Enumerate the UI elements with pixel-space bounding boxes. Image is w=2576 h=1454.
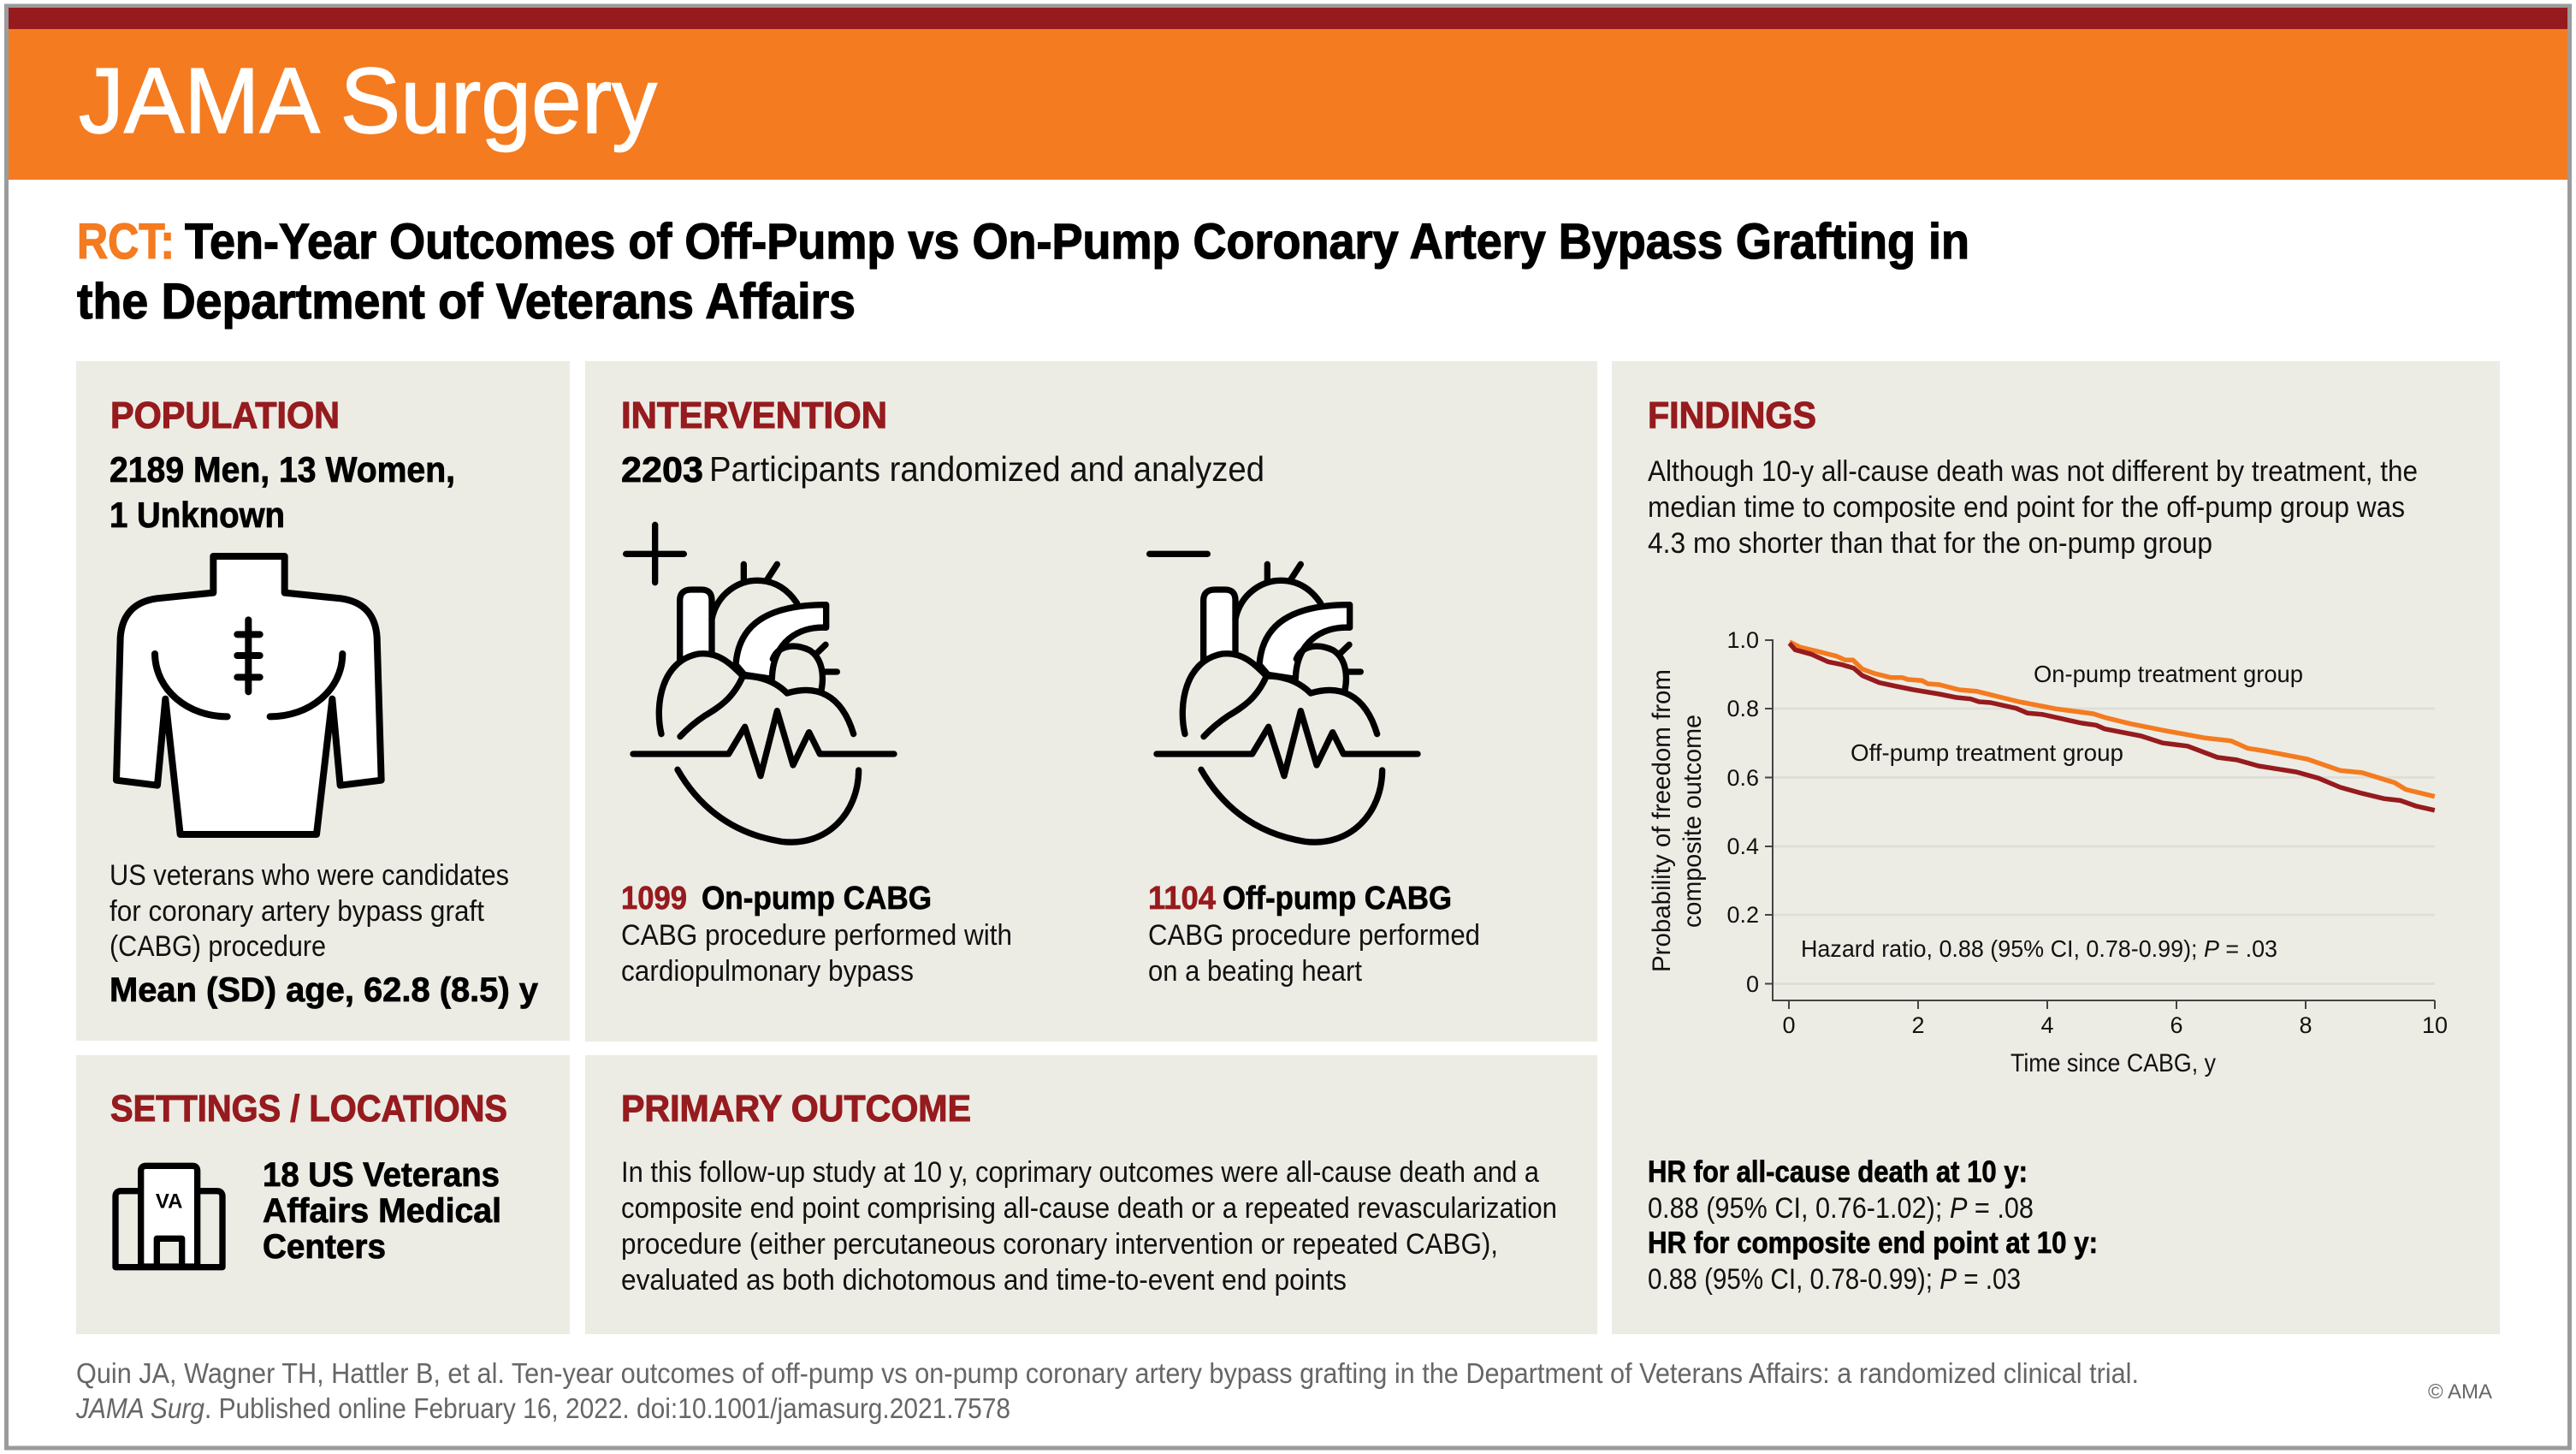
arm: on-pump CABG: CABG procedure performed with — [621, 919, 1012, 952]
panel: primary outcome — [585, 1055, 1597, 1334]
citation — [75, 1357, 2139, 1424]
panel: intervention — [585, 361, 1597, 1042]
y-axis tick labels: 0.2 — [1726, 902, 1759, 928]
header banner — [9, 8, 2567, 180]
y-axis tick labels: 1.0 — [1726, 627, 1759, 653]
number of sites — [263, 1156, 501, 1266]
x-axis tick labels: 4 — [2040, 1012, 2054, 1038]
randomized participants: 2203 — [621, 449, 703, 490]
x-axis tick labels: 10 — [2422, 1012, 2448, 1038]
curve: off-pump treatment group — [1790, 644, 2435, 810]
mean age: Mean (SD) age, 62.8 (8.5) y — [110, 971, 539, 1009]
participant counts — [110, 449, 455, 535]
number of sites: 18 US Veterans — [263, 1156, 500, 1194]
findings summary: Although 10-y all-cause death was not different by treatment, the — [1648, 455, 2418, 488]
hazard ratio annotation: Hazard ratio, 0.88 (95% CI, 0.78-0.99); P = .03 — [1801, 935, 2277, 962]
panel: findings — [1612, 361, 2500, 1334]
icon: torso with sternal incision — [116, 556, 382, 834]
primary outcome description: evaluated as both dichotomous and time-to-event end points — [621, 1264, 1347, 1297]
title — [77, 214, 1969, 329]
citation: Quin JA, Wagner TH, Hattler B, et al. Ten-year outcomes of off-pump vs on-pump coronary artery bypass grafting in the Department of Veterans Affairs: a randomized clinical trial. — [76, 1357, 2139, 1389]
hazard ratio results: 0.88 (95% CI, 0.76-1.02); P = .08 — [1648, 1192, 2034, 1225]
hazard ratio results: HR for all-cause death at 10 y: — [1648, 1155, 2028, 1189]
primary outcome description: composite end point comprising all-cause death or a repeated revascularization — [621, 1192, 1557, 1225]
hazard ratio results: 0.88 (95% CI, 0.78-0.99); P = .03 — [1648, 1263, 2021, 1296]
label: off-pump treatment group: Off-pump treatment group — [1851, 739, 2123, 766]
heading: settings / locations: SETTINGS / LOCATIONS — [110, 1088, 507, 1130]
title: Ten-Year Outcomes of Off-Pump vs On-Pump Coronary Artery Bypass Grafting in — [185, 214, 1969, 270]
number of sites: Affairs Medical — [263, 1192, 501, 1230]
arm: off-pump CABG: on a beating heart — [1148, 955, 1362, 988]
heading: intervention: INTERVENTION — [621, 395, 887, 436]
icon: VA hospital building — [115, 1166, 222, 1267]
arm: on-pump CABG: On-pump CABG — [702, 881, 932, 917]
heading: findings: FINDINGS — [1648, 395, 1816, 436]
arm: off-pump CABG: Off-pump CABG — [1223, 881, 1452, 917]
title: RCT: — [77, 214, 175, 270]
primary outcome description: In this follow-up study at 10 y, coprimary outcomes were all-cause death and a — [621, 1156, 1540, 1189]
findings summary — [1648, 455, 2418, 560]
primary outcome description: procedure (either percutaneous coronary intervention or repeated CABG), — [621, 1228, 1498, 1261]
y-axis tick labels: 0 — [1746, 971, 1759, 997]
panel: settings and locations — [76, 1055, 570, 1334]
findings summary: median time to composite end point for the off-pump group was — [1648, 491, 2405, 524]
x-axis tick labels: 8 — [2299, 1012, 2312, 1038]
y-axis tick labels — [1726, 627, 1759, 997]
x-axis tick labels: 0 — [1782, 1012, 1796, 1038]
population description: for coronary artery bypass graft — [110, 895, 484, 928]
heading: primary outcome: PRIMARY OUTCOME — [621, 1088, 971, 1130]
chart: Kaplan-Meier freedom from composite outcome — [1648, 627, 2448, 1077]
x-axis title: Time since CABG, y — [2010, 1049, 2216, 1077]
participant counts: 2189 Men, 13 Women, — [110, 449, 455, 490]
y-axis title: composite outcome — [1679, 715, 1707, 928]
primary outcome description — [621, 1156, 1557, 1297]
x-axis tick labels — [1782, 1012, 2448, 1038]
population description: US veterans who were candidates — [110, 859, 509, 892]
hazard ratio results — [1648, 1155, 2098, 1296]
arm: off-pump CABG: CABG procedure performed — [1148, 919, 1480, 952]
icon: heart with minus (off-pump) — [1150, 554, 1418, 842]
y-axis title — [1648, 669, 1707, 972]
randomized participants: Participants randomized and analyzed — [709, 449, 1264, 489]
panel: population — [76, 361, 570, 1041]
y-axis tick labels: 0.6 — [1726, 765, 1759, 791]
icon: heart with plus (on-pump) — [626, 525, 894, 842]
y-axis tick labels: 0.8 — [1726, 696, 1759, 721]
arm: on-pump CABG: cardiopulmonary bypass — [621, 955, 914, 988]
curve: on-pump treatment group — [1790, 642, 2435, 797]
arm: off-pump CABG: 1104 — [1148, 881, 1216, 917]
number of sites: Centers — [263, 1228, 386, 1266]
arm: on-pump CABG: 1099 — [621, 881, 687, 917]
label: on-pump treatment group: On-pump treatment group — [2034, 661, 2303, 687]
y-axis title: Probability of freedom from — [1648, 669, 1676, 972]
x-axis tick labels: 6 — [2170, 1012, 2183, 1038]
title: the Department of Veterans Affairs — [77, 274, 856, 329]
arm: on-pump CABG — [621, 881, 1012, 988]
icon: VA hospital building: VA — [156, 1190, 182, 1214]
journal name: JAMA Surgery — [79, 49, 657, 153]
citation: JAMA Surg. Published online February 16, 2022. doi:10.1001/jamasurg.2021.7578 — [75, 1392, 1010, 1424]
participant counts: 1 Unknown — [110, 495, 285, 535]
heading: population: POPULATION — [110, 395, 340, 436]
population description: (CABG) procedure — [110, 930, 326, 963]
arm: off-pump CABG — [1148, 881, 1480, 988]
population description — [110, 859, 509, 963]
findings summary: 4.3 mo shorter than that for the on-pump group — [1648, 527, 2212, 560]
x-axis tick labels: 2 — [1911, 1012, 1925, 1038]
copyright: © AMA — [2428, 1380, 2492, 1404]
y-axis tick labels: 0.4 — [1726, 834, 1759, 859]
hazard ratio results: HR for composite end point at 10 y: — [1648, 1226, 2098, 1260]
